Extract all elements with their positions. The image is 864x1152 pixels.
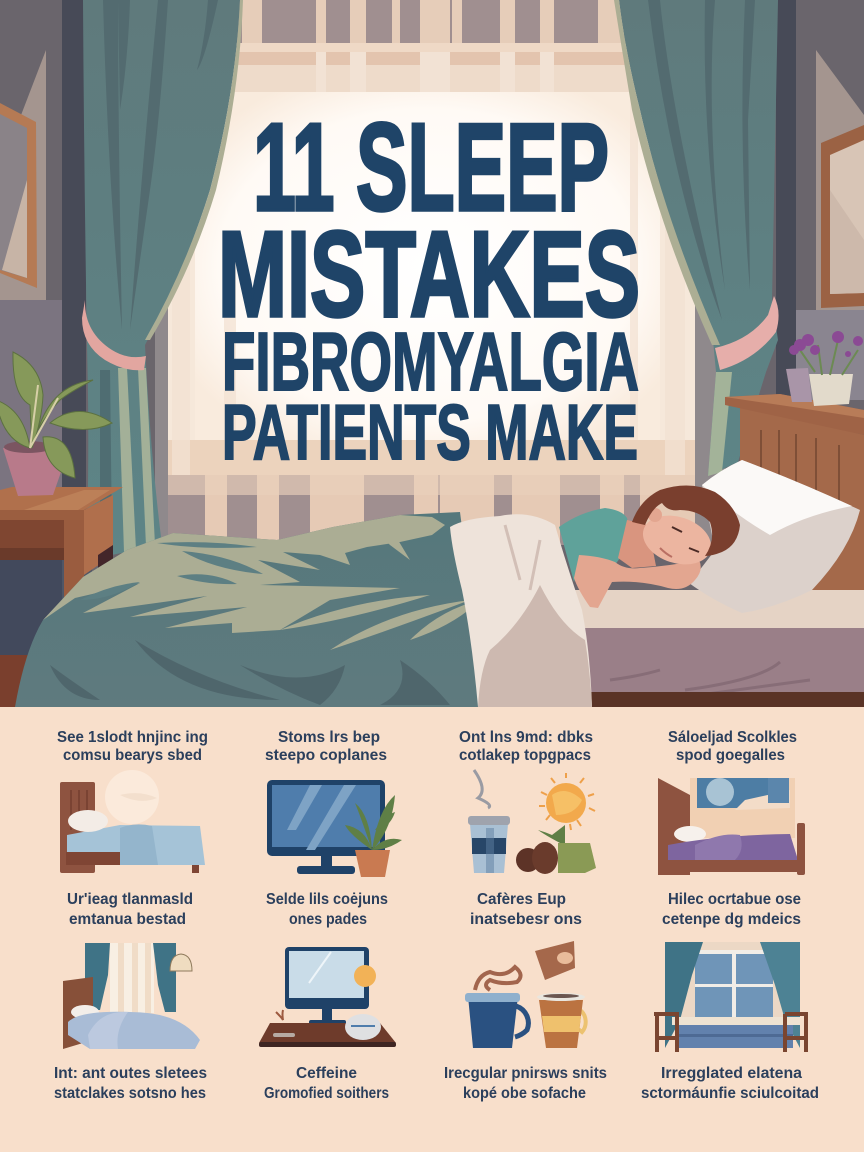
title: FIBROMYALGIA [222, 315, 639, 408]
icon: monitor with plant [267, 780, 402, 877]
caption row 2: inatsebesr ons [470, 911, 582, 928]
right curtain [614, 0, 778, 476]
face [637, 507, 717, 573]
title: MISTAKES [218, 206, 640, 342]
lower panel [0, 707, 864, 1152]
flowers and pots [786, 331, 863, 406]
right mirror [821, 125, 864, 308]
title: PATIENTS MAKE [222, 388, 638, 476]
caption row 3: sctormáunfie sciulcoitad [641, 1085, 819, 1102]
caption row 3: Irecgular pnirsws snits [444, 1065, 607, 1082]
caption row 2: ones pades [289, 911, 367, 928]
icon: window with curtains and chairs [654, 942, 808, 1052]
caption row 3 [54, 1065, 819, 1102]
icon: bed with window [658, 778, 805, 875]
caption row 3: statclakes sotsno hes [54, 1085, 206, 1102]
caption row 2: Cafères Eup [477, 891, 566, 908]
shirt [559, 508, 629, 582]
mattress [575, 590, 864, 707]
icon: coffee cup and sun [468, 770, 596, 874]
icon: bed with moon [60, 770, 205, 873]
caption row 3: Gromofied soithers [264, 1085, 389, 1102]
caption row 1: spod goegalles [676, 747, 785, 764]
green blanket [15, 512, 485, 707]
pillow [689, 460, 860, 613]
caption row 2: emtanua bestad [69, 911, 186, 928]
caption row 2: Ur'ieag tlanmasld [67, 891, 193, 908]
arm [574, 555, 701, 608]
caption row 1: Ont lns 9md: dbks [459, 729, 593, 746]
potted plant [0, 352, 112, 496]
caption row 2: Selde lils coėjuns [266, 891, 388, 908]
caption row 3: kopé obe sofache [463, 1085, 586, 1102]
back wall [0, 0, 864, 707]
left mirror [0, 103, 37, 288]
icon: bed with curtains and lamp [63, 943, 200, 1049]
caption row 3: Irregglated elatena [661, 1065, 802, 1082]
window [155, 0, 725, 552]
caption row 2: cetenpe dg mdeics [662, 911, 801, 928]
caption row 1: Stoms lrs bep [278, 729, 380, 746]
caption row 1: cotlakep topgpacs [459, 747, 591, 764]
right pink tieback [715, 296, 779, 370]
left pink tieback [82, 300, 146, 370]
headboard [725, 394, 864, 620]
hair [632, 485, 740, 556]
title [218, 99, 640, 476]
icon: monitor on desk [259, 947, 396, 1047]
caption row 2 [67, 891, 801, 928]
sleeping person [559, 485, 740, 608]
caption row 2: Hilec ocrtabue ose [668, 891, 801, 908]
caption row 1: comsu bearys sbed [63, 747, 202, 764]
white sheet [450, 514, 592, 707]
title: 11 SLEEP [253, 99, 609, 237]
caption row 3: Int: ant outes sletees [54, 1065, 207, 1082]
icon: two mugs [465, 941, 586, 1048]
caption row 1: steepo coplanes [265, 747, 387, 764]
neck and chest [618, 520, 656, 568]
caption row 1: See 1slodt hnjinc ing [57, 729, 208, 746]
caption row 1 [57, 729, 797, 764]
caption row 3: Ceffeine [296, 1065, 357, 1082]
nightstand [0, 487, 123, 610]
left curtain [83, 0, 243, 560]
caption row 1: Sáloeljad Scolkles [668, 729, 797, 746]
bedroom scene [0, 0, 864, 707]
